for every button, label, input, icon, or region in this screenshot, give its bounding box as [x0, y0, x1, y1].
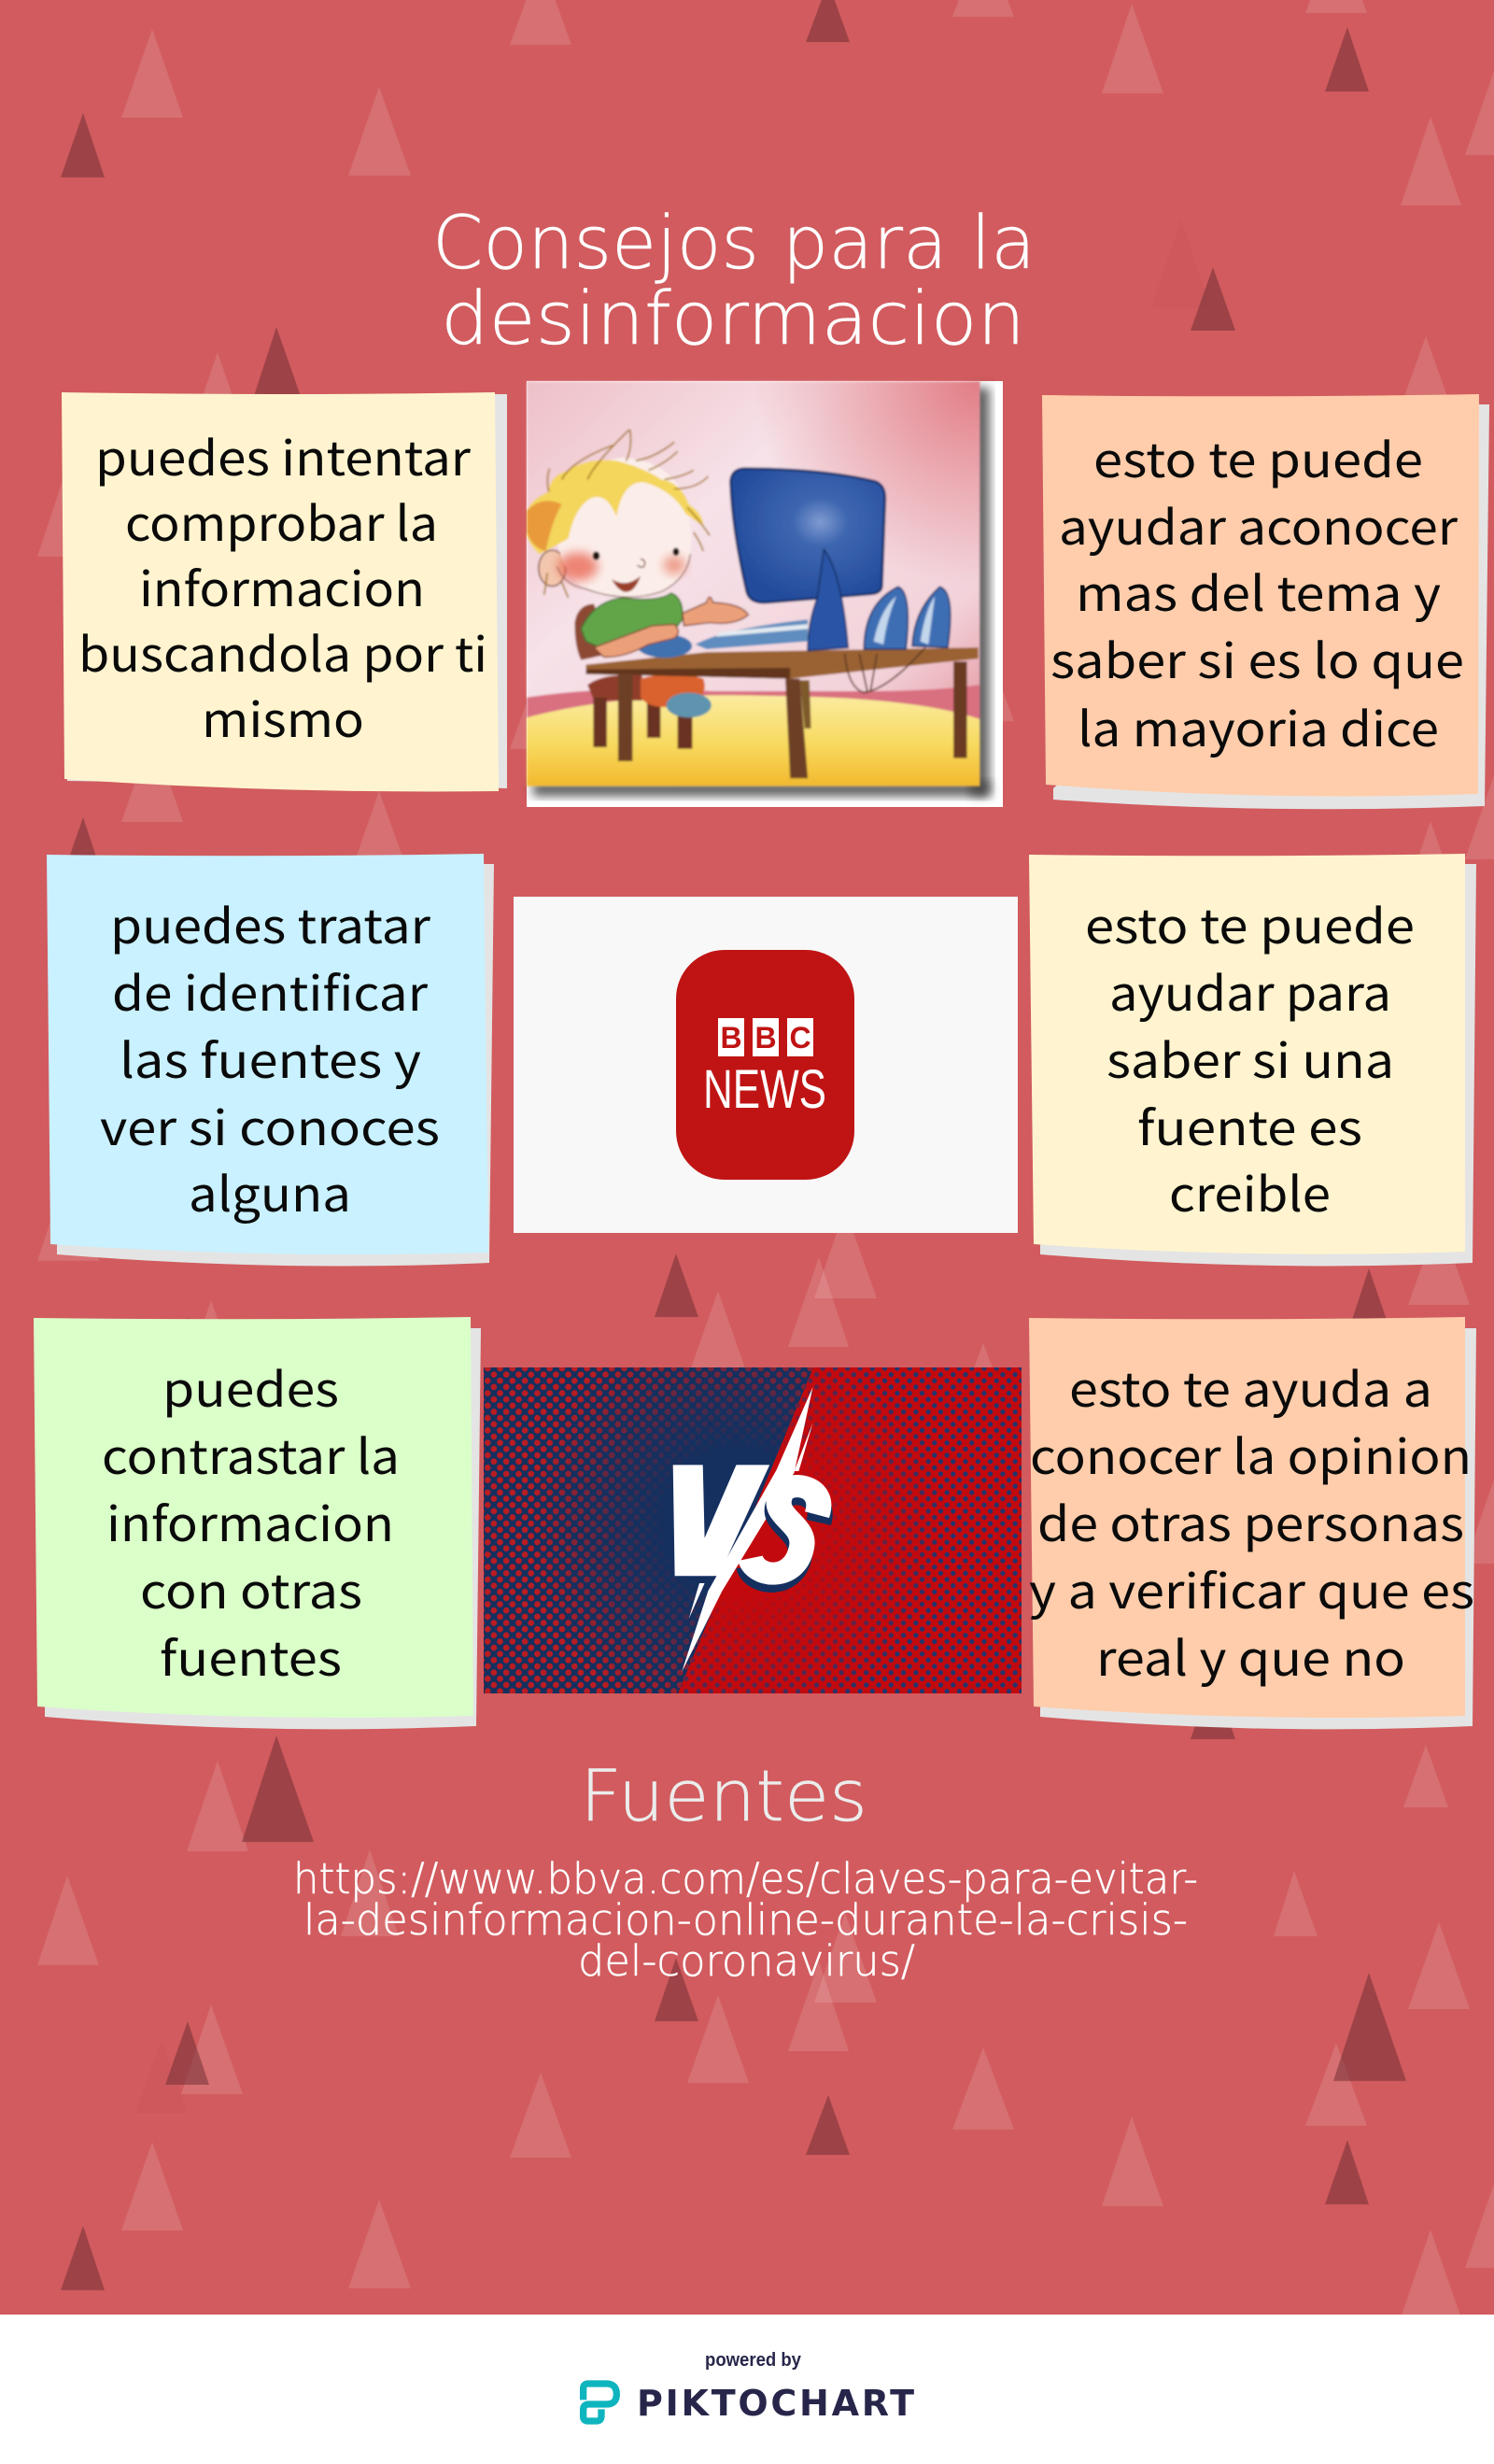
sticky note: contrastar con otras fuentes [34, 1317, 481, 1729]
sticky note: contrastar con otras fuentes: puedes [162, 1352, 339, 1421]
sticky note: opinion de otras personas: y a verificar que es [1029, 1553, 1474, 1622]
sticky note: comprobar la informacion: comprobar la [125, 486, 438, 555]
sticky note: conocer mas del tema: esto te puede [1093, 422, 1423, 491]
sticky note: identificar las fuentes [47, 854, 494, 1266]
head [539, 550, 566, 587]
arms [594, 624, 679, 657]
sticky note: conocer mas del tema: la mayoria dice [1078, 691, 1439, 760]
title: desinformacion [441, 277, 1025, 361]
source link [293, 1854, 1198, 1986]
chair [574, 604, 610, 660]
image: boy at computer [527, 381, 1003, 807]
sticky note: conocer mas del tema [1042, 394, 1489, 809]
sticky note: comprobar la informacion: puedes intentar [95, 420, 471, 489]
source link: la-desinformacion-online-durante-la-crisis- [303, 1895, 1188, 1945]
table [585, 647, 979, 679]
sticky note: opinion de otras personas [1029, 1317, 1476, 1729]
sticky note: conocer mas del tema: mas del tema y [1076, 556, 1441, 625]
sticky note: conocer mas del tema: saber si es lo que [1050, 623, 1464, 692]
sticky note: opinion de otras personas: conocer la opinion [1030, 1419, 1472, 1488]
image: BBC News logo: B [720, 1021, 742, 1055]
sticky note: identificar las fuentes: de identificar [112, 956, 428, 1025]
sticky note: fuente creible [1029, 854, 1476, 1266]
sticky note: fuente creible: creible [1169, 1156, 1331, 1225]
sticky note: contrastar con otras fuentes: informacion [106, 1486, 394, 1555]
footer: powered by Piktochart: powered by [705, 2350, 802, 2371]
footer: powered by Piktochart: PIKTOCHART [637, 2383, 914, 2424]
monitor [730, 469, 885, 602]
cables [845, 647, 925, 693]
image: BBC News logo [514, 897, 1018, 1233]
speakers [864, 587, 908, 649]
sticky note: conocer mas del tema: ayudar aconocer [1059, 489, 1458, 559]
title: Consejos para la [432, 202, 1036, 286]
sticky note: opinion de otras personas: de otras personas [1037, 1486, 1464, 1555]
hair [527, 460, 703, 554]
sticky note: fuente creible: saber si una [1106, 1023, 1394, 1092]
mouse and blue [638, 634, 692, 658]
sticky note: identificar las fuentes: las fuentes y [120, 1023, 421, 1092]
heading: Fuentes: Fuentes [580, 1754, 867, 1837]
sticky note: fuente creible: fuente es [1137, 1090, 1362, 1159]
sticky note: identificar las fuentes: alguna [189, 1156, 351, 1225]
sticky note: comprobar la informacion: mismo [202, 682, 364, 751]
sticky note: opinion de otras personas: real y que no [1096, 1621, 1405, 1690]
sticky note: comprobar la informacion: buscandola por ti [78, 616, 487, 686]
title [432, 202, 1036, 361]
footer: powered by Piktochart [0, 2315, 1494, 2464]
sticky note: identificar las fuentes: ver si conoces [100, 1090, 440, 1159]
source link: https://www.bbva.com/es/claves-para-evitar- [293, 1854, 1198, 1904]
legs [641, 674, 705, 707]
image: BBC News logo: NEWS [703, 1059, 826, 1120]
image: BBC News logo: C [789, 1021, 811, 1055]
sticky note: fuente creible: esto te puede [1085, 888, 1415, 957]
icon: Piktochart mark [584, 2384, 616, 2421]
sticky note: contrastar con otras fuentes: contrastar la [102, 1419, 400, 1488]
sticky note: contrastar con otras fuentes: con otras [140, 1553, 362, 1622]
stand [808, 549, 848, 651]
image: VS versus graphic [484, 1367, 1022, 1693]
sticky note: contrastar con otras fuentes: fuentes [160, 1621, 342, 1690]
sticky note: comprobar la informacion [62, 392, 507, 791]
sticky note: fuente creible: ayudar para [1109, 956, 1391, 1025]
image: BBC News logo: B [754, 1021, 777, 1055]
source link: del-coronavirus/ [578, 1936, 915, 1986]
sticky note: comprobar la informacion: informacion [139, 551, 425, 620]
sticky note: identificar las fuentes: puedes tratar [110, 888, 430, 957]
keyboard [696, 619, 808, 649]
sticky note: opinion de otras personas: esto te ayuda a [1069, 1352, 1432, 1421]
shirt [581, 593, 683, 647]
